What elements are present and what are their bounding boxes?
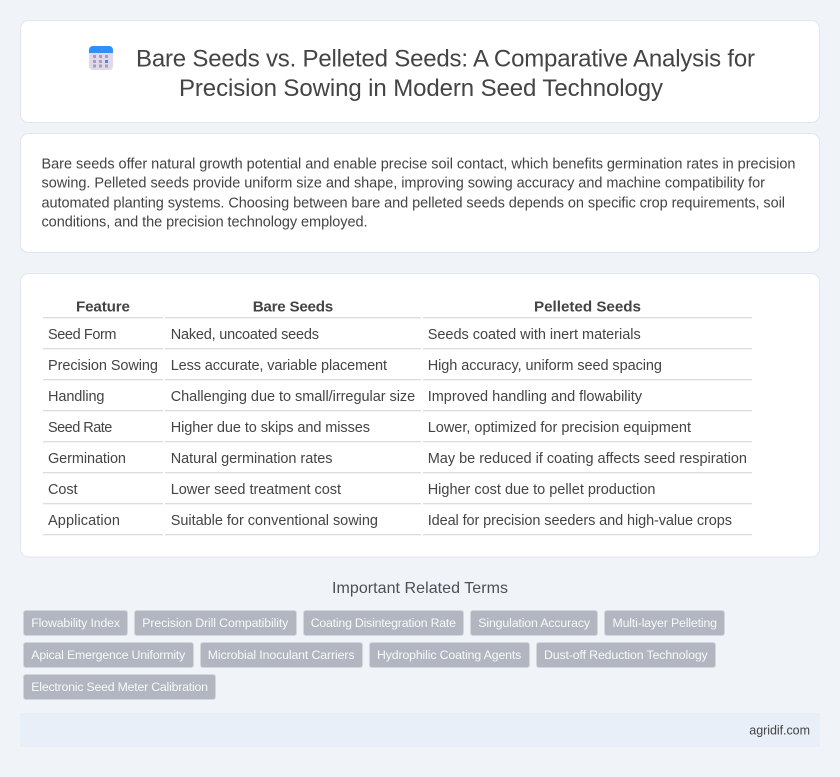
row: seed form xyxy=(48,327,641,343)
panel: summary xyxy=(20,134,820,252)
row: handling: Improved handling and flowability xyxy=(428,389,643,405)
row: cost: Higher cost due to pellet production xyxy=(428,482,656,498)
panel: comparison table xyxy=(20,274,820,557)
title xyxy=(136,46,755,102)
row: germination xyxy=(48,451,747,467)
tag xyxy=(24,610,128,636)
row: application xyxy=(48,513,732,529)
tag xyxy=(470,610,598,636)
row: cost xyxy=(48,482,656,498)
row: seed form: Seeds coated with inert materials xyxy=(428,327,641,343)
tag: Electronic Seed Meter Calibration xyxy=(31,680,208,694)
row: precision sowing xyxy=(48,358,662,374)
tag: Microbial Inoculant Carriers xyxy=(208,648,354,662)
row: germination: Germination xyxy=(48,451,126,467)
row: seed rate: Higher due to skips and misses xyxy=(171,420,370,436)
summary text xyxy=(42,156,796,230)
table header xyxy=(76,299,641,316)
row: handling: Challenging due to small/irregular size xyxy=(171,389,415,405)
tag: Precision Drill Compatibility xyxy=(142,616,289,630)
row: germination: Natural germination rates xyxy=(171,451,332,467)
tag: Flowability Index xyxy=(31,616,121,630)
tag: Multi-layer Pelleting xyxy=(612,616,717,630)
table header: Feature xyxy=(76,299,130,316)
tag: Dust-off Reduction Technology xyxy=(544,648,709,662)
tag xyxy=(24,674,216,700)
row: application: Ideal for precision seeders and high-value crops xyxy=(428,513,732,529)
footer: agridif.com xyxy=(749,724,810,738)
table header: Pelleted Seeds xyxy=(534,299,641,316)
title: Bare Seeds vs. Pelleted Seeds: A Comparative Analysis for xyxy=(136,46,755,72)
icon: calendar xyxy=(89,46,113,70)
row: handling: Handling xyxy=(48,389,104,405)
summary text: sowing. Pelleted seeds provide uniform size and shape, improving sowing accuracy and machine compatibility for xyxy=(42,176,765,192)
summary text: Bare seeds offer natural growth potential and enable precise soil contact, which benefits germination rates in precision xyxy=(42,156,796,172)
row: handling xyxy=(48,389,643,405)
tag xyxy=(134,610,296,636)
panel: title header xyxy=(20,20,820,122)
row: precision sowing: Precision Sowing xyxy=(48,358,158,374)
summary text: automated planting systems. Choosing between bare and pelleted seeds depends on specific crop requirements, soil xyxy=(42,195,785,211)
tag xyxy=(370,642,530,668)
tag: Apical Emergence Uniformity xyxy=(31,648,186,662)
row: seed rate xyxy=(48,420,691,436)
row: seed form: Naked, uncoated seeds xyxy=(171,327,319,343)
summary text: conditions, and the precision technology employed. xyxy=(42,214,368,230)
row: cost: Lower seed treatment cost xyxy=(171,482,341,498)
row: precision sowing: Less accurate, variable placement xyxy=(171,358,387,374)
row: seed rate: Lower, optimized for precision equipment xyxy=(428,420,691,436)
tag: Singulation Accuracy xyxy=(478,616,591,630)
tags: related terms xyxy=(24,610,724,700)
row: seed rate: Seed Rate xyxy=(48,420,112,436)
table header: Bare Seeds xyxy=(253,299,333,316)
row: application: Application xyxy=(48,513,120,529)
tag xyxy=(604,610,724,636)
tag xyxy=(536,642,716,668)
title: Precision Sowing in Modern Seed Technology xyxy=(179,75,663,102)
row: cost: Cost xyxy=(48,482,78,498)
tag: Coating Disintegration Rate xyxy=(311,616,456,630)
row: precision sowing: High accuracy, uniform seed spacing xyxy=(428,358,662,374)
tag xyxy=(24,642,194,668)
heading: related terms: Important Related Terms xyxy=(332,580,508,597)
row: seed form: Seed Form xyxy=(48,327,116,343)
tag xyxy=(200,642,362,668)
row: application: Suitable for conventional sowing xyxy=(171,513,378,529)
tag xyxy=(304,610,464,636)
tag: Hydrophilic Coating Agents xyxy=(377,648,521,662)
footer xyxy=(20,713,820,747)
row: germination: May be reduced if coating affects seed respiration xyxy=(428,451,747,467)
